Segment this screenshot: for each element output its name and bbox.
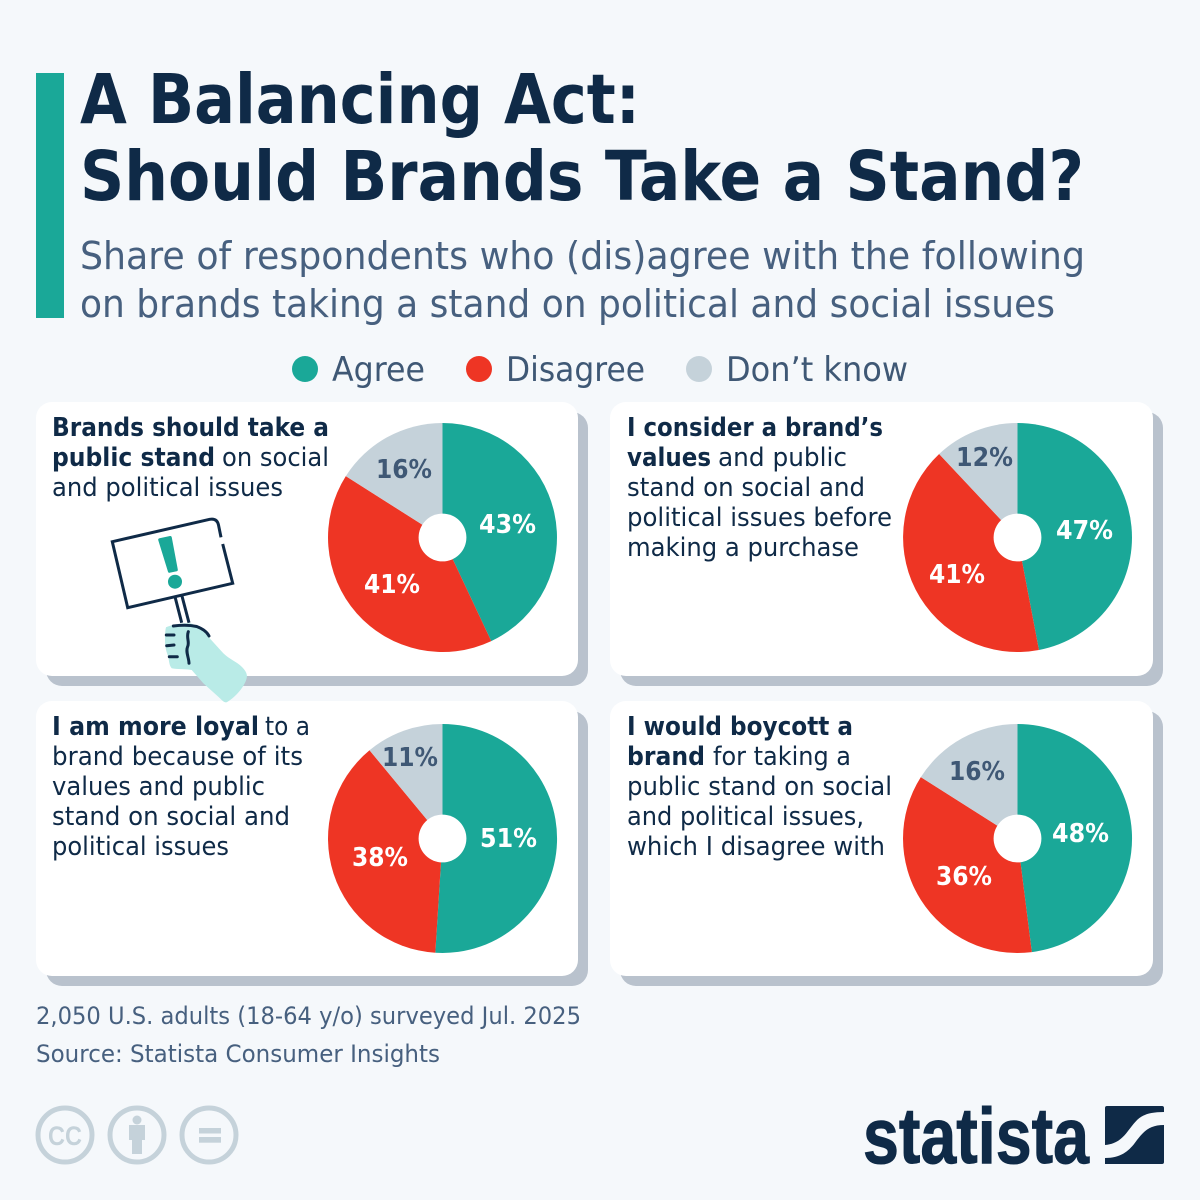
statement text: political issues before xyxy=(627,503,892,533)
panel: more loyal xyxy=(36,701,588,986)
statement text: political issues xyxy=(52,832,229,862)
pie chart: 48 36 16: 36% xyxy=(936,862,992,892)
title xyxy=(80,60,1084,217)
icon: creative commons licence: CC xyxy=(48,1121,82,1151)
statement text: which I disagree with xyxy=(627,832,885,862)
panel: boycott xyxy=(610,701,1163,986)
statement text: I consider a brand’s xyxy=(627,413,883,443)
pie chart: 48 36 16: 16% xyxy=(949,757,1005,787)
pie chart: 51 38 11: 51% xyxy=(480,824,537,854)
subtitle: on brands taking a stand on political and social issues xyxy=(80,282,1055,326)
icon: creative commons licence xyxy=(38,1108,236,1162)
footnote: 2,050 U.S. adults (18-64 y/o) surveyed Jul. 2025 xyxy=(36,1002,581,1030)
pie chart: 43 41 16: 43% xyxy=(479,510,536,540)
pie chart: 51 38 11: 38% xyxy=(352,843,408,873)
statement text: stand on social and xyxy=(52,802,290,832)
statement text: and public xyxy=(718,443,847,473)
panel: brands should take a stand xyxy=(36,402,588,686)
pie chart: 47 41 12 xyxy=(903,423,1132,652)
pie chart: 48 36 16 xyxy=(903,724,1132,953)
title: A Balancing Act: xyxy=(80,60,640,140)
statement text: values xyxy=(627,443,711,473)
statement text: making a purchase xyxy=(627,533,859,563)
pie chart: 47 41 12: 47% xyxy=(1056,516,1113,546)
footnote xyxy=(36,1002,581,1068)
legend xyxy=(292,350,908,390)
statement text: values and public xyxy=(52,772,265,802)
statement text: stand on social and xyxy=(627,473,865,503)
title: Should Brands Take a Stand? xyxy=(80,137,1084,217)
pie chart: 48 36 16: 48% xyxy=(1052,819,1109,849)
pie chart: 47 41 12: 12% xyxy=(956,443,1013,473)
statement text: to a xyxy=(265,712,310,742)
pie chart: 51 38 11: 11% xyxy=(382,743,438,773)
statement text: for taking a xyxy=(713,742,851,772)
statement text: and political issues xyxy=(52,473,283,503)
statement text: brand xyxy=(627,742,705,772)
pie chart: 43 41 16: 41% xyxy=(364,570,420,600)
statement text xyxy=(627,712,892,862)
accent bar xyxy=(36,73,64,318)
statement text xyxy=(52,712,310,862)
panel: consider values xyxy=(610,402,1163,686)
statement text: and political issues, xyxy=(627,802,864,832)
pie chart: 51 38 11 xyxy=(328,724,557,953)
pie chart: 43 41 16 xyxy=(328,423,557,652)
logo: statista: statista xyxy=(863,1091,1090,1180)
legend: Disagree xyxy=(506,350,645,390)
statement text: I would boycott a xyxy=(627,712,853,742)
statement text xyxy=(627,413,892,563)
pie chart: 47 41 12: 41% xyxy=(929,560,985,590)
statement text: public stand xyxy=(52,443,215,473)
statement text: Brands should take a xyxy=(52,413,329,443)
footnote: Source: Statista Consumer Insights xyxy=(36,1040,440,1068)
statement text: I am more loyal xyxy=(52,712,259,742)
subtitle xyxy=(80,234,1085,326)
pie chart: 43 41 16: 16% xyxy=(376,455,432,485)
statement text xyxy=(52,413,329,503)
statement text: public stand on social xyxy=(627,772,892,802)
subtitle: Share of respondents who (dis)agree with the following xyxy=(80,234,1085,278)
legend: Don’t know xyxy=(726,350,908,390)
icon: hand holding exclamation sign xyxy=(112,519,247,702)
legend: Agree xyxy=(332,350,425,390)
statement text: on social xyxy=(222,443,329,473)
statement text: brand because of its xyxy=(52,742,303,772)
